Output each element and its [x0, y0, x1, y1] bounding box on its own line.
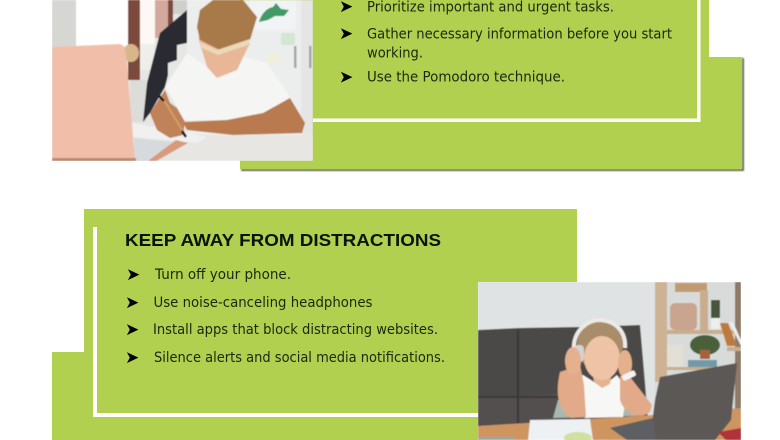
bullet: phone: ➤	[126, 265, 140, 285]
bullet: headphones: ➤	[125, 293, 139, 313]
bullet: block apps	[125, 320, 438, 340]
bullet: block apps: Install apps that block distracting websites.	[153, 322, 438, 338]
bullet: phone: Turn off your phone.	[154, 267, 291, 283]
green panel background	[52, 209, 577, 440]
bullet: silence alerts	[125, 348, 445, 368]
bullet: gather information: Gather necessary information before you start	[367, 26, 672, 42]
bullet: pomodoro	[339, 68, 565, 88]
bullet: block apps: ➤	[125, 320, 139, 340]
white frame line	[313, 0, 700, 122]
bullet: silence alerts: Silence alerts and social media notifications.	[154, 350, 445, 366]
green panel background	[240, 0, 742, 169]
panel: keep away from distractions	[52, 209, 577, 440]
bullet: headphones: Use noise-canceling headphones	[154, 295, 372, 311]
bullet list: tasks	[339, 0, 672, 88]
white frame line	[93, 227, 478, 417]
heading: KEEP AWAY FROM DISTRACTIONS	[125, 230, 441, 250]
bullet: phone	[126, 265, 291, 285]
photo: boy writing at desk	[52, 0, 313, 161]
bullet: gather information: ➤	[339, 24, 353, 44]
photo: girl with headphones at laptop	[478, 282, 741, 440]
panel shadow	[241, 58, 744, 171]
bullet: pomodoro: ➤	[339, 68, 353, 88]
bullet: gather information	[339, 24, 672, 62]
bullet: pomodoro: Use the Pomodoro technique.	[367, 70, 565, 86]
bullet: gather information: working.	[367, 46, 423, 62]
panel: plan your tasks	[240, 0, 744, 171]
bullet list: distractions	[125, 265, 445, 368]
bullet: silence alerts: ➤	[125, 348, 139, 368]
bullet: headphones	[125, 293, 372, 313]
